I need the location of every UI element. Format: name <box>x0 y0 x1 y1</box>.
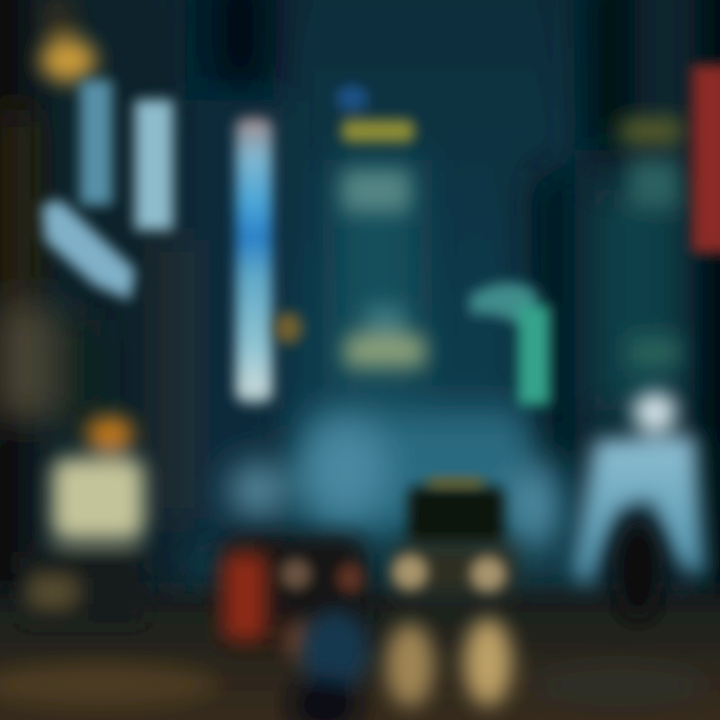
figure: pale blue light at right <box>572 392 705 585</box>
figure: dark pedestrian at right <box>612 520 664 620</box>
sign: green neon curve <box>470 282 550 405</box>
vehicle: red car or scooter <box>222 535 367 645</box>
glow: pale blue street crowd <box>228 420 555 550</box>
sign: grey-teal tower panels <box>342 170 425 367</box>
sign: yellow and blue tower top <box>336 85 414 142</box>
sign: small amber marker <box>274 312 302 344</box>
left building: warm brown facade <box>0 110 100 430</box>
sign: red vertical sign at right <box>692 65 720 253</box>
shop: glowing left storefront <box>20 416 145 622</box>
figure: dark rider in foreground <box>289 610 369 720</box>
sign: tall blue and white vertical sign <box>236 118 272 403</box>
road reflections: warm headlight streaks <box>0 618 710 709</box>
sign: amber street lamp top left <box>38 0 96 82</box>
sign: dim yellow right tower <box>620 118 682 370</box>
central tower: teal glow <box>310 160 680 530</box>
road: warm wet street <box>0 590 720 720</box>
vehicle: truck with headlights <box>392 478 515 595</box>
sign: pale blue vertical signs left <box>42 80 173 300</box>
